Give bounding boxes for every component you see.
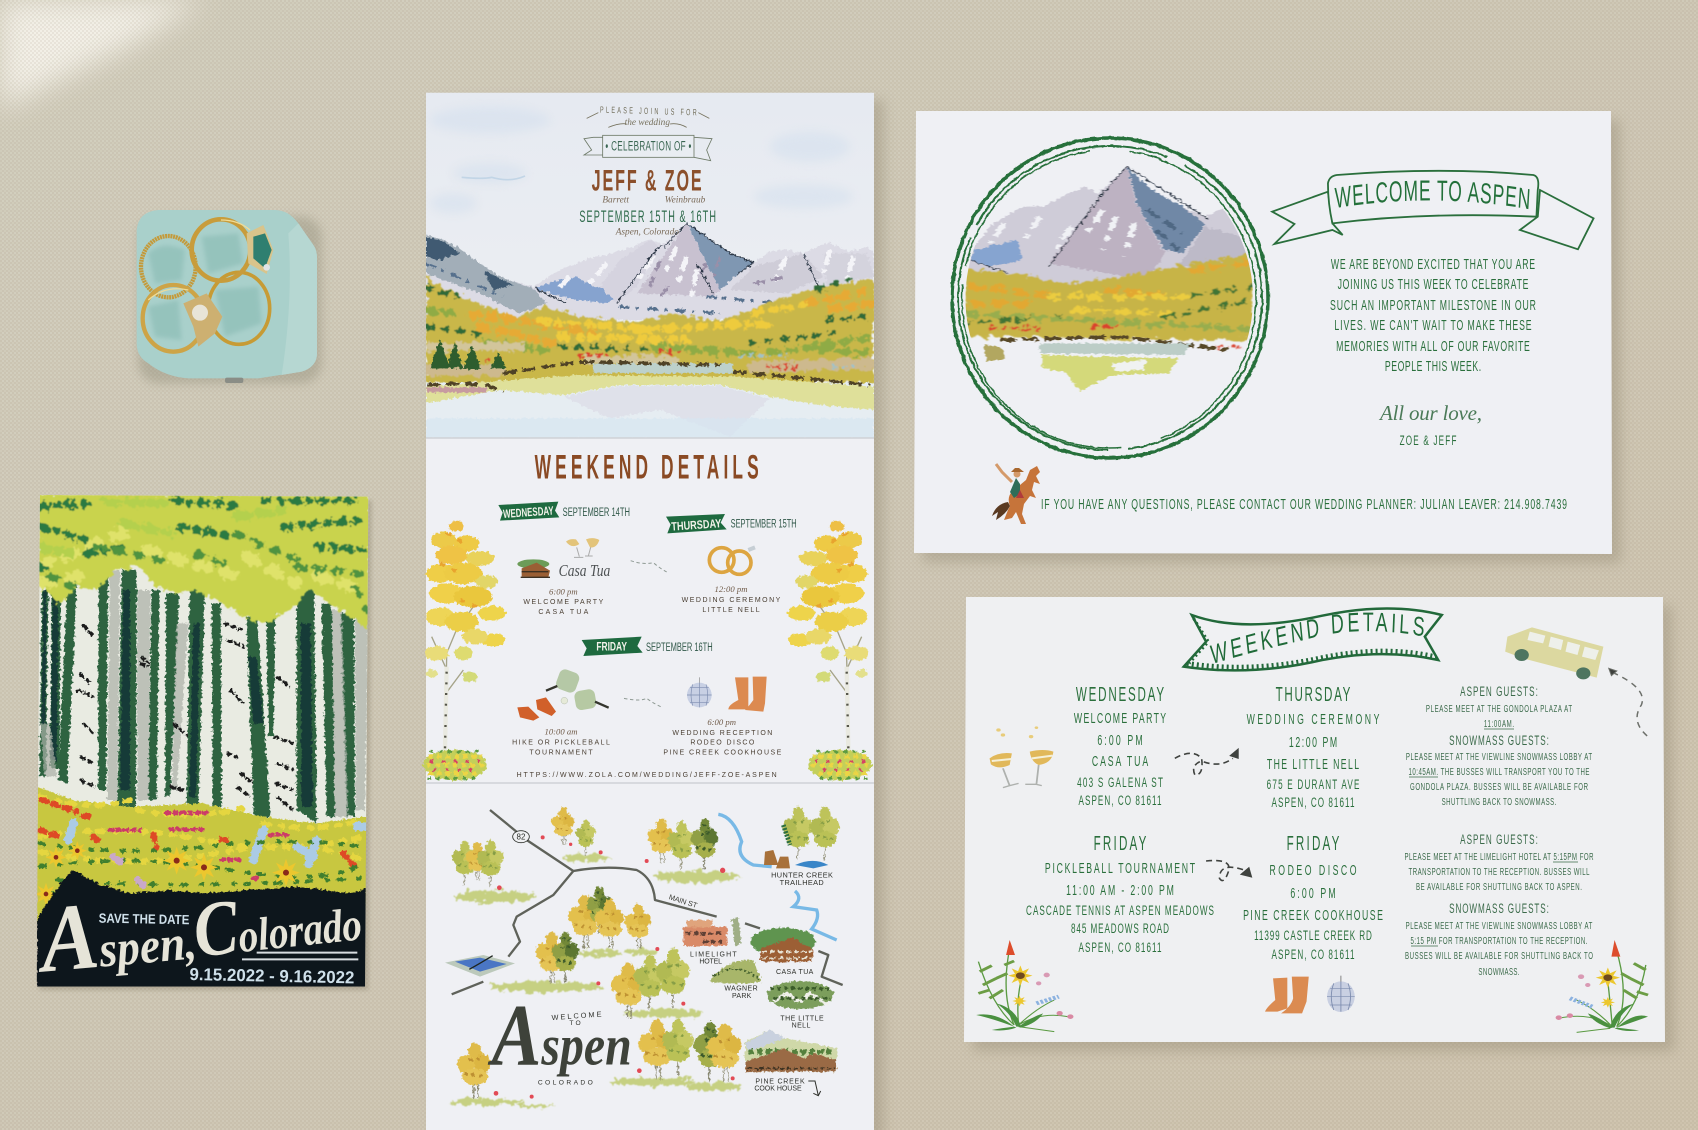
column: Wednesday and Friday pickleball: ASPEN, CO 81611	[1079, 941, 1161, 956]
column: shuttle instructions: PLEASE MEET AT THE LIMELIGHT HOTEL AT 5:15PM FOR	[1404, 850, 1594, 862]
Thursday: LITTLE NELL	[702, 607, 760, 614]
map title: Aspen	[487, 986, 632, 1084]
save the date card	[30, 490, 380, 993]
icon: wildflowers right	[1556, 940, 1648, 1032]
welcome message: PEOPLE THIS WEEK.	[1385, 358, 1481, 375]
welcome banner: WELCOME TO ASPEN	[1334, 180, 1530, 210]
welcome message: WE ARE BEYOND EXCITED THAT YOU ARE	[1331, 256, 1535, 273]
rivers	[718, 814, 837, 940]
welcome message: LIVES. WE CAN'T WAIT TO MAKE THESE	[1334, 317, 1532, 334]
signature	[1378, 401, 1482, 449]
map title: COLORADO	[538, 1080, 593, 1087]
Casa Tua	[751, 928, 816, 976]
column: shuttle instructions: TRANSPORTATION TO THE RECEPTION. BUSSES WILL	[1409, 865, 1590, 877]
panel: invitation with watercolor mountains	[426, 93, 874, 439]
heading: WEEKEND DETAILS	[535, 447, 759, 486]
icon: disco ball	[687, 677, 712, 707]
panel: illustrated map of Aspen	[445, 806, 843, 1107]
invitation wording	[579, 104, 716, 238]
panel: weekend details schedule	[423, 447, 872, 780]
map title: TO	[569, 1020, 581, 1027]
highway badge	[513, 831, 529, 843]
Pine Creek Cookhouse: PINE CREEK	[755, 1078, 805, 1085]
Wednesday	[498, 502, 630, 616]
welcome message: JOINING US THIS WEEK TO CELEBRATE	[1338, 276, 1528, 293]
Wednesday: CASA TUA	[538, 609, 589, 616]
Friday: TOURNAMENT	[529, 749, 593, 756]
Limelight Hotel: HOTEL	[699, 959, 722, 966]
Friday: 6:00 pm	[707, 717, 736, 727]
column: Thursday and Friday rodeo	[1243, 684, 1383, 963]
Wednesday: SEPTEMBER 14TH	[563, 505, 630, 519]
column: Wednesday and Friday pickleball	[1026, 684, 1214, 956]
column: Thursday and Friday rodeo: PINE CREEK COOKHOUSE	[1243, 907, 1383, 924]
icon: pickleball paddles and shoes	[517, 668, 609, 721]
The Little Nell: NELL	[792, 1023, 810, 1030]
ring: braided band	[141, 236, 196, 297]
column: Thursday and Friday rodeo: THE LITTLE NELL	[1267, 756, 1359, 773]
column: Wednesday and Friday pickleball: WELCOME PARTY	[1074, 710, 1166, 727]
column: shuttle instructions: SNOWMASS.	[1478, 965, 1520, 977]
banner heading: WEEKEND DETAILS	[1210, 612, 1424, 663]
Thursday: WEDDING CEREMONY	[682, 597, 781, 604]
ring box	[137, 210, 322, 383]
column: Wednesday and Friday pickleball: PICKLEBALL TOURNAMENT	[1045, 860, 1195, 877]
column: Thursday and Friday rodeo: THURSDAY	[1276, 684, 1350, 706]
dotted route	[631, 561, 667, 572]
icon: cowboy boots	[728, 677, 767, 712]
column: Wednesday and Friday pickleball: CASCADE TENNIS AT ASPEN MEADOWS	[1026, 904, 1214, 919]
weekend details card	[964, 597, 1665, 1042]
icon: shuttle bus	[1505, 627, 1603, 679]
ring: diamond ring	[143, 285, 222, 352]
Aspen, Colorado script title: Aspen,	[31, 873, 200, 993]
Casa Tua: CASA TUA	[776, 969, 814, 976]
Aspen, Colorado script title: Colorado	[189, 870, 365, 974]
Thursday: THURSDAY	[671, 516, 722, 534]
invitation wording: Aspen, Colorado	[615, 228, 679, 238]
column: Wednesday and Friday pickleball: FRIDAY	[1094, 833, 1146, 855]
Friday: WEDDING RECEPTION	[672, 730, 772, 737]
invitation wording: SEPTEMBER 15TH & 16TH	[579, 207, 716, 226]
watercolor mountain in ring	[964, 167, 1254, 392]
invitation wording: Barrett	[602, 196, 629, 206]
aspen trunks	[39, 567, 368, 823]
invitation wording: JEFF & ZOE	[592, 166, 702, 198]
Thursday: SEPTEMBER 15TH	[731, 517, 797, 531]
map title: WELCOME	[551, 1010, 602, 1022]
column: shuttle instructions: ASPEN GUESTS:	[1460, 685, 1538, 700]
column: shuttle instructions: BE AVAILABLE FOR SHUTTLING BACK TO ASPEN.	[1416, 880, 1582, 892]
column: shuttle instructions: 10:45AM. THE BUSSES WILL TRANSPORT YOU TO THE	[1409, 765, 1590, 777]
column: Wednesday and Friday pickleball: 403 S GALENA ST	[1077, 776, 1163, 791]
invitation wording: • CELEBRATION OF •	[605, 139, 691, 154]
column: Wednesday and Friday pickleball: WEDNESDAY	[1076, 684, 1164, 706]
flower mounds	[423, 750, 872, 780]
Friday: 10:00 am	[545, 727, 577, 737]
icon: champagne glasses	[566, 538, 599, 557]
time underlines	[1409, 729, 1578, 946]
Wagner Park: PARK	[732, 993, 752, 1000]
card shadows	[434, 100, 1674, 1130]
save the date text: SAVE THE DATE	[99, 911, 190, 927]
Hunter Creek trailhead	[764, 825, 833, 887]
dashed arrows between events	[1175, 749, 1252, 881]
Wagner Park	[709, 960, 762, 1000]
column: shuttle instructions: SHUTTLING BACK TO SNOWMASS.	[1442, 795, 1556, 807]
Thursday	[666, 514, 797, 614]
Friday: PINE CREEK COOKHOUSE	[663, 750, 782, 757]
road label: MAIN ST	[668, 892, 699, 910]
icon: Casa Tua lodge	[517, 559, 550, 577]
The Little Nell	[767, 981, 833, 1030]
column: shuttle instructions: BUSSES WILL BE AVAILABLE FOR SHUTTLING BACK TO	[1405, 949, 1593, 961]
canopy	[37, 493, 370, 630]
ring: emerald ring	[192, 219, 273, 281]
Friday: FRIDAY	[596, 640, 627, 654]
roads	[452, 810, 843, 994]
aspen tree clusters	[452, 806, 839, 1098]
column: Thursday and Friday rodeo: 11399 CASTLE CREEK RD	[1254, 929, 1372, 944]
Aspen, Colorado script title	[31, 870, 365, 993]
welcome message	[1330, 256, 1536, 375]
icon: wedding rings	[709, 547, 755, 574]
Wednesday: Casa Tua	[559, 561, 610, 580]
icon: cowboy boots and disco ball	[1265, 976, 1355, 1013]
dashed arrow to bus	[1609, 668, 1648, 737]
Friday: SEPTEMBER 16TH	[646, 640, 713, 654]
highway badge: 82	[517, 833, 526, 842]
mountains	[426, 223, 874, 320]
icon: wildflowers left	[976, 940, 1073, 1032]
welcome card	[914, 111, 1612, 554]
Pine Creek Cookhouse: COOK HOUSE	[754, 1086, 802, 1093]
event dates: 9.15.2022 - 9.16.2022	[189, 964, 355, 987]
Wednesday: WEDNESDAY	[503, 503, 554, 521]
wedding website: HTTPS://WWW.ZOLA.COM/WEDDING/JEFF-ZOE-ASPEN	[517, 772, 777, 779]
column: shuttle instructions	[1404, 685, 1594, 977]
Limelight Hotel: LIMELIGHT	[690, 951, 737, 958]
column: Thursday and Friday rodeo: 12:00 PM	[1289, 734, 1337, 751]
column: Thursday and Friday rodeo: RODEO DISCO	[1270, 862, 1356, 879]
wildflower meadow	[37, 787, 367, 923]
Friday: HIKE OR PICKLEBALL	[512, 739, 610, 746]
column: shuttle instructions: SNOWMASS GUESTS:	[1449, 734, 1549, 749]
column: shuttle instructions: GONDOLA PLAZA. BUSSES WILL BE AVAILABLE FOR	[1410, 780, 1588, 792]
Pine Creek Cookhouse	[745, 1030, 837, 1096]
invitation wording: Weinbraub	[665, 196, 706, 206]
aspen trees left and right	[425, 521, 869, 750]
column: Wednesday and Friday pickleball: CASA TUA	[1092, 753, 1149, 770]
Friday: RODEO DISCO	[690, 740, 755, 747]
column: Wednesday and Friday pickleball: ASPEN, CO 81611	[1079, 794, 1161, 809]
Wednesday: WELCOME PARTY	[523, 599, 604, 606]
ring frame	[952, 138, 1268, 458]
wildflower accents	[494, 835, 735, 1099]
column: Thursday and Friday rodeo: 6:00 PM	[1290, 885, 1336, 902]
icon: champagne glasses	[990, 726, 1053, 788]
column: Wednesday and Friday pickleball: 6:00 PM	[1097, 732, 1143, 749]
wedding planner contact line: IF YOU HAVE ANY QUESTIONS, PLEASE CONTACT OUR WEDDING PLANNER: JULIAN LEAVER: 214.908.7439	[1041, 496, 1567, 513]
dotted route	[624, 698, 661, 707]
invitation wording: PLEASE JOIN US FOR	[600, 104, 697, 118]
column: Thursday and Friday rodeo: FRIDAY	[1287, 833, 1339, 855]
column: Thursday and Friday rodeo: ASPEN, CO 81611	[1272, 948, 1354, 963]
icon: bucking horse and cowboy	[992, 464, 1040, 524]
column: shuttle instructions: SNOWMASS GUESTS:	[1449, 902, 1549, 917]
signature: All our love,	[1378, 401, 1482, 425]
autumn hillside	[426, 277, 874, 383]
ground washes	[450, 854, 742, 1107]
invitation trifold card	[423, 93, 874, 1130]
Wagner Park: WAGNER	[724, 986, 758, 993]
column: Thursday and Friday rodeo: WEDDING CEREMONY	[1247, 711, 1379, 728]
The Little Nell: THE LITTLE	[780, 1015, 824, 1022]
ring: large band	[208, 272, 270, 344]
column: shuttle instructions: PLEASE MEET AT THE GONDOLA PLAZA AT	[1426, 702, 1573, 714]
welcome message: MEMORIES WITH ALL OF OUR FAVORITE	[1336, 338, 1530, 355]
pine trees	[430, 340, 506, 369]
invitation wording: the wedding	[625, 118, 670, 128]
column: Thursday and Friday rodeo: ASPEN, CO 81611	[1272, 796, 1354, 811]
column: shuttle instructions: PLEASE MEET AT THE VIEWLINE SNOWMASS LOBBY AT	[1406, 750, 1593, 762]
welcome banner	[1270, 170, 1595, 250]
Limelight Hotel	[683, 918, 738, 966]
Thursday: 12:00 pm	[715, 584, 747, 594]
column: shuttle instructions: PLEASE MEET AT THE VIEWLINE SNOWMASS LOBBY AT	[1406, 919, 1593, 931]
Hunter Creek trailhead: TRAILHEAD	[780, 878, 824, 887]
dark lettering field	[37, 870, 367, 990]
alpine lake with reflection	[426, 368, 874, 439]
column: Wednesday and Friday pickleball: 845 MEADOWS ROAD	[1071, 922, 1169, 937]
column: Wednesday and Friday pickleball: 11:00 AM - 2:00 PM	[1066, 882, 1174, 899]
column: shuttle instructions: 5:15 PM FOR TRANSPORTATION TO THE RECEPTION.	[1411, 934, 1587, 946]
column: Thursday and Friday rodeo: 675 E DURANT AVE	[1267, 778, 1360, 793]
signature: ZOE & JEFF	[1400, 434, 1456, 449]
Hunter Creek trailhead: HUNTER CREEK	[771, 871, 833, 880]
Wednesday: 6:00 pm	[549, 586, 578, 596]
Friday	[512, 637, 782, 757]
column: shuttle instructions: ASPEN GUESTS:	[1460, 833, 1538, 848]
welcome message: SUCH AN IMPORTANT MILESTONE IN OUR	[1330, 297, 1536, 314]
column: shuttle instructions: 11:00AM.	[1484, 717, 1514, 729]
pickleball court	[445, 955, 515, 977]
